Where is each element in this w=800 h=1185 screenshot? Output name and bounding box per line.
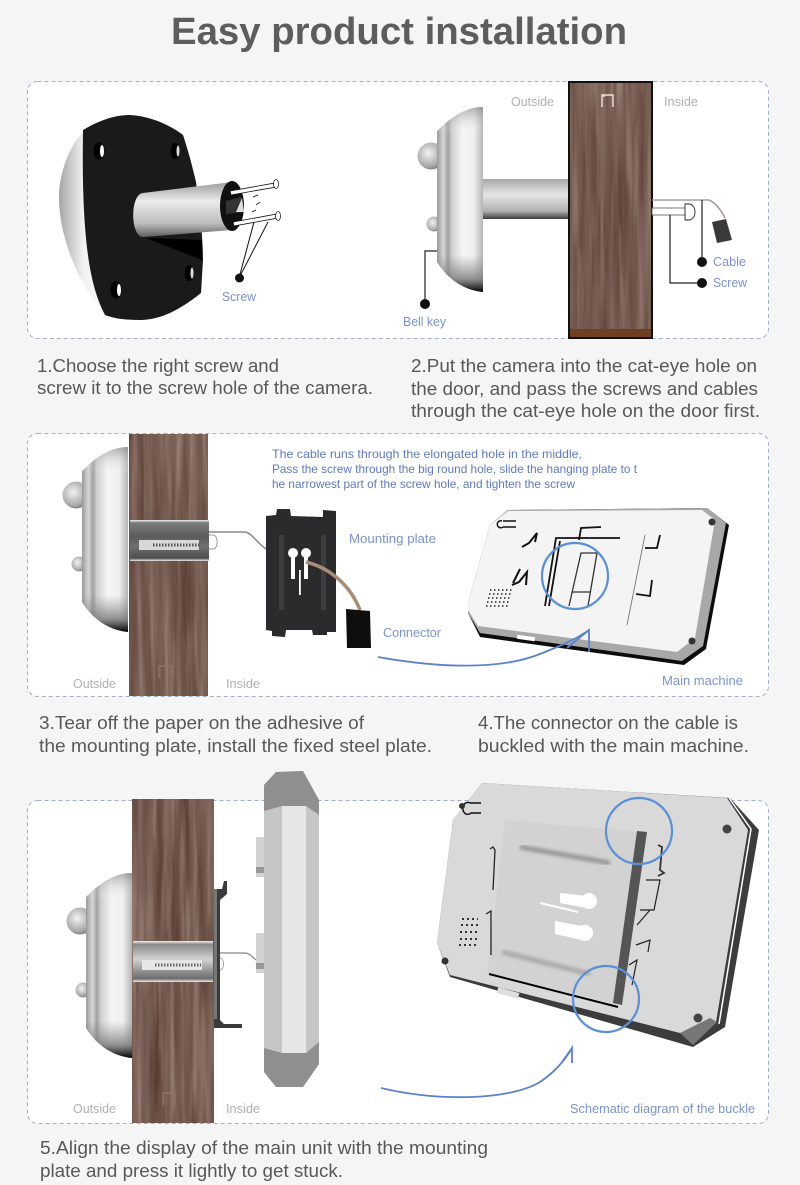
text block: step 1: screw it to the screw hole of the camera. [37, 378, 373, 398]
icon: main machine back [468, 508, 729, 665]
icon: mounting plate side view [214, 881, 256, 1028]
note: cable instructions: The cable runs through the elongated hole in the middle, [272, 447, 582, 461]
title: Easy product installation [171, 11, 627, 53]
text block: step 2: the door, and pass the screws and cables [411, 379, 758, 399]
text block: step 5: 5.Align the display of the main unit with the mounting [40, 1138, 488, 1158]
label: outside: Outside [511, 95, 554, 109]
text block: step 3: 3.Tear off the paper on the adhesive of [39, 713, 365, 733]
icon: camera rear view with screws [59, 115, 280, 320]
text block: step 2: 2.Put the camera into the cat-eye hole on [411, 356, 757, 376]
icon: steel bracket [133, 941, 224, 982]
icon: camera side view [62, 447, 128, 632]
arrow: to buckle detail [381, 1048, 572, 1097]
note: cable instructions: Pass the screw through the big round hole, slide the hanging plate to t [272, 462, 638, 476]
text block: step 5: plate and press it lightly to get stuck. [40, 1161, 343, 1181]
door [132, 799, 214, 1123]
note: cable instructions: he narrowest part of the screw hole, and tighten the screw [272, 477, 575, 491]
icon: steel bracket [130, 520, 266, 561]
icon: mounting plate with cable and connector [266, 509, 371, 648]
icon: main unit side view [256, 771, 319, 1087]
callout: screw [670, 215, 748, 290]
label: connector: Connector [383, 626, 441, 640]
text block: step 3: the mounting plate, install the fixed steel plate. [39, 736, 432, 756]
callout: cable [697, 200, 746, 269]
callout: bell key: Bell key [403, 315, 447, 329]
icon: camera side view [418, 107, 568, 292]
callout: screw: Screw [713, 276, 748, 290]
label: inside: Inside [664, 95, 698, 109]
door [569, 82, 652, 338]
label: inside: Inside [226, 677, 260, 691]
label: outside: Outside [73, 1102, 116, 1116]
icon: screw and cable with connector [652, 200, 732, 243]
panel: step 3 and 4 illustrations [28, 434, 768, 696]
label: mounting plate: Mounting plate [349, 532, 436, 546]
callout: bell key [403, 251, 447, 329]
text block: step 4: 4.The connector on the cable is [478, 713, 738, 733]
label: outside: Outside [73, 677, 116, 691]
text block: step 1: 1.Choose the right screw and [37, 356, 279, 376]
panel: step 5 illustrations [28, 771, 768, 1124]
label: schematic diagram: Schematic diagram of the buckle [570, 1102, 755, 1116]
door [129, 434, 208, 696]
label: screw: Screw [222, 290, 257, 304]
callout: cable: Cable [713, 255, 746, 269]
label: main machine: Main machine [662, 674, 743, 688]
icon: camera side view [66, 873, 132, 1058]
icon: main unit back with mounting plate [437, 783, 759, 1047]
label: inside: Inside [226, 1102, 260, 1116]
text block: step 4: buckled with the main machine. [478, 736, 749, 756]
text block: step 2: through the cat-eye hole on the door first. [411, 401, 760, 421]
panel: step 1 and 2 illustrations [28, 82, 768, 338]
arrow: connector to main machine [378, 630, 589, 666]
